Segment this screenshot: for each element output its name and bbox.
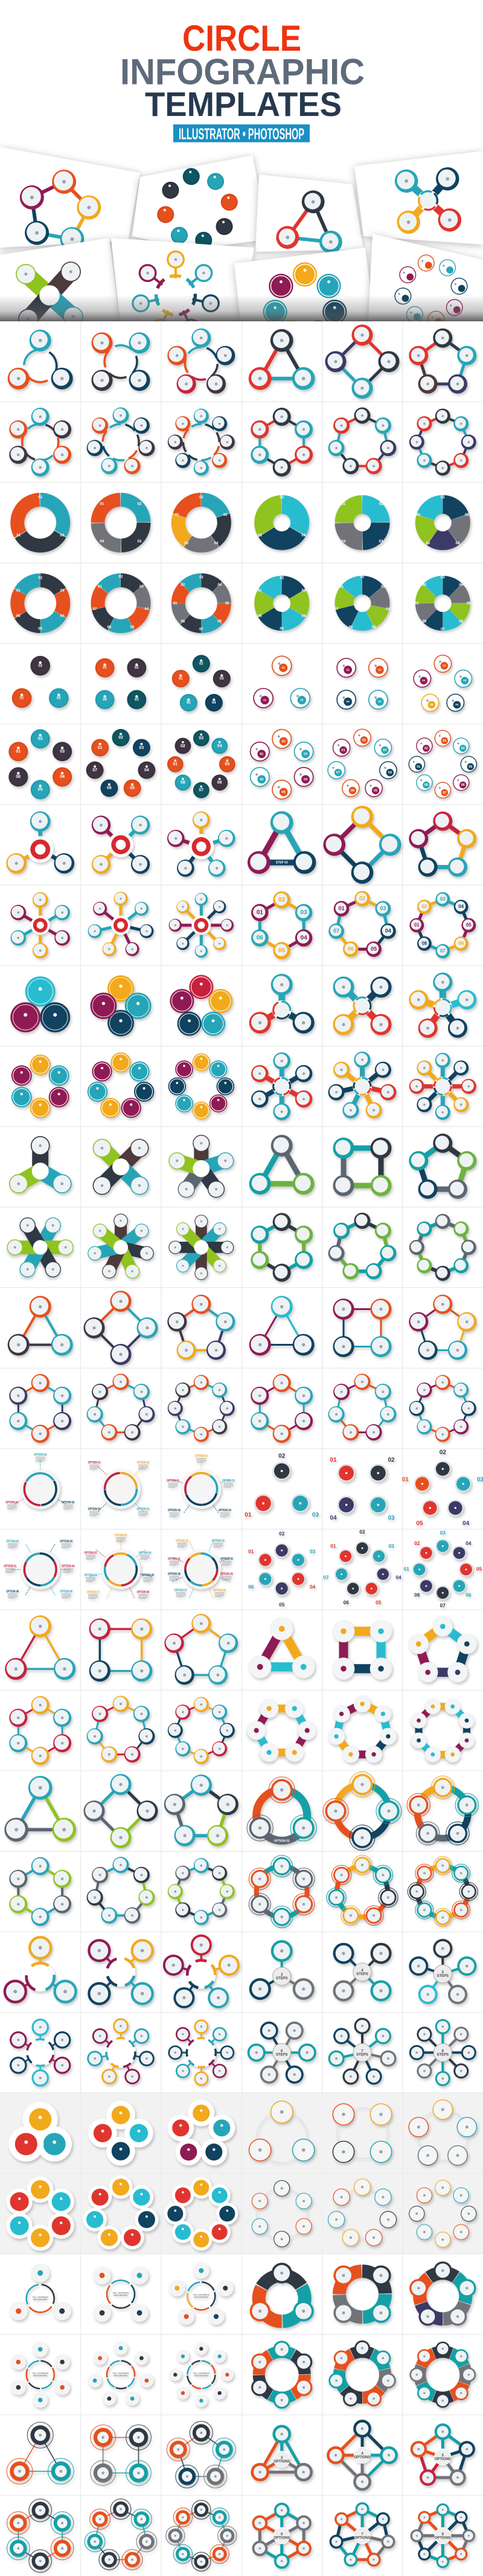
r5c4 wedge nodes 3: [250, 652, 313, 711]
r24c4 light nodes 6: [249, 2178, 315, 2250]
r22c5 steps hub 7: [326, 2016, 398, 2087]
r13c2 ribbon 4: [80, 1288, 161, 1368]
r11c4 step triangle green: [246, 1132, 318, 1198]
r27c4 network 3: [248, 2422, 316, 2484]
row 27: [7, 2417, 478, 2493]
r19c5 option arcs 4: [323, 1772, 401, 1851]
r5c3 discs 5: [169, 652, 233, 714]
r12c3 capsules 8: [167, 1213, 236, 1282]
title line: INFOGRAPHIC: INFOGRAPHIC: [120, 52, 365, 92]
r15c3 option ring 5: [167, 1454, 235, 1517]
r27c6 network 5: OPTIONS: [435, 2458, 451, 2461]
r6c6 wedge nodes 8: [406, 727, 479, 801]
r21c5 steps hub 4: 4: [361, 1969, 363, 1973]
row 5: [9, 652, 475, 715]
r12c5 step ring 7: [326, 1210, 398, 1282]
r23c1 soft circles 3: [4, 2096, 77, 2167]
row 17: [2, 1611, 480, 1688]
r15c2 option ring 4: [88, 1461, 150, 1515]
r18c6 bands 8: [395, 1683, 483, 1778]
r6c5 wedge nodes 7: [325, 726, 400, 800]
r2c2 ring 7: [85, 405, 157, 477]
r26c3 spheres 8: CELL BUSINESS: [193, 2372, 210, 2375]
sheet 4: four-step swirl: [354, 151, 483, 245]
r2c4 polygon 6: [248, 405, 316, 480]
r26c5 thick ring 7: [326, 2338, 398, 2409]
r7c4 step triangle: [244, 808, 319, 878]
r1c6 polygon 5: [406, 326, 479, 396]
row 13: [4, 1288, 479, 1368]
r25c2 spheres 4: CELL BUSINESS: [112, 2292, 129, 2294]
r19c4 option arcs 3: [247, 1777, 316, 1850]
r7c5 step diamond: [320, 803, 405, 887]
r9c1 blobs 3: [6, 972, 75, 1037]
r19c3 ribbon 5: [161, 1771, 242, 1849]
r18c5 bands 7: [325, 1693, 399, 1765]
r25c3 spheres 5: CELL BUSINESS: [193, 2293, 210, 2296]
r27c5 network 4: 4: [361, 2452, 363, 2456]
r2c3 ring 8: [165, 406, 237, 478]
r17c4 bands 3: [245, 1614, 318, 1681]
row 14: [7, 1371, 479, 1445]
row 15: [5, 1449, 483, 1527]
r7c3 spokes 5: [165, 809, 238, 879]
r20c2 ribbon 7: [85, 1854, 157, 1926]
r2c1 ring 6: [7, 405, 74, 480]
r14c1 ribbon 6: [7, 1371, 74, 1445]
r28c2 outlined nodes 7: [85, 2499, 157, 2570]
r23c3 soft circles 5: [164, 2096, 239, 2170]
r20c4 option arcs 6: [247, 1855, 316, 1928]
r21c4 steps hub 3: STEPS: [276, 1977, 288, 1980]
grey background band: [0, 2093, 483, 2254]
r28c6 network 8: 8: [442, 2533, 444, 2536]
r22c6 steps hub 8: [407, 2017, 479, 2089]
row 1: [4, 321, 479, 402]
r24c3 soft circles 8: [161, 2174, 242, 2254]
r1c1 ring 3: [4, 326, 76, 393]
r12c2 capsules 7: [86, 1212, 156, 1280]
sheet 2: eight discs: [129, 153, 260, 247]
sheet 7: overlapping blobs: [231, 245, 371, 321]
r28c6 network 8: [408, 2501, 477, 2570]
r21c1 arrows ring 3: [0, 1932, 81, 2007]
r18c3 arrows lines 8: [165, 1695, 237, 1766]
r25c4 thick ring 3: [246, 2260, 317, 2330]
r9c2 blobs 4: [86, 971, 155, 1040]
r10c6 swirl 8: [407, 1050, 479, 1122]
row 10: [8, 1049, 479, 1123]
r19c1 ribbon 3: [1, 1772, 80, 1845]
r18c1 arrows lines 6: [7, 1694, 74, 1768]
r10c2 blobs 7: [85, 1049, 157, 1121]
row 3: [9, 490, 469, 555]
r17c5 bands 4: [329, 1617, 395, 1683]
r26c2 spheres 7: CELL BUSINESS: [112, 2372, 129, 2375]
row 21: [0, 1932, 479, 2011]
r15c6 half discs 5: [402, 1449, 483, 1527]
r21c4 steps hub 3: [246, 1937, 318, 2003]
r19c4 option arcs 3: OPTION 01: [274, 1840, 290, 1843]
r25c2 spheres 4: INFOGRAPHIC: [114, 2294, 128, 2296]
r27c3 outlined nodes 5: [167, 2421, 235, 2488]
r8c5 numbered ring 7: [326, 888, 398, 959]
r22c4 steps hub 6: 6: [281, 2049, 283, 2053]
r27c4 network 3: 3: [281, 2456, 283, 2460]
r25c1 spheres 3: CELL BUSINESS: [32, 2296, 49, 2298]
r7c2 spokes 4: [89, 813, 153, 876]
r4c2 donut 7: [89, 571, 153, 635]
r21c4 steps hub 3: 3: [281, 1973, 283, 1977]
r7c4 step triangle: STEP 03: [276, 861, 288, 865]
r23c2 soft circles 4: [84, 2096, 158, 2170]
r28c5 network 7: 7: [361, 2533, 363, 2536]
r21c6 steps hub 5: STEPS: [437, 1974, 449, 1978]
r14c3 ribbon 8: [165, 1373, 237, 1444]
r14c5 star line 7: [326, 1371, 398, 1443]
r14c4 star line 6: [248, 1371, 316, 1445]
r16c3 option ring 8: [161, 1529, 242, 1610]
r26c6 thick ring 8: [408, 2339, 478, 2410]
r10c3 blobs 8: [165, 1050, 237, 1122]
row 6: [5, 726, 479, 803]
r25c6 thick ring 5: [407, 2259, 479, 2328]
r8c2 spokes 7: [86, 890, 156, 958]
r26c3 spheres 8: [167, 2340, 235, 2409]
r16c6 half discs 8: [403, 1530, 482, 1608]
r9c5 swirl 4: [330, 974, 395, 1038]
r17c1 arrows lines 3: [2, 1612, 79, 1683]
r23c5 light nodes 4: [329, 2100, 395, 2166]
title line: TEMPLATES: TEMPLATES: [145, 85, 342, 124]
row 16: [2, 1529, 482, 1610]
r24c5 light nodes 7: [325, 2176, 399, 2249]
r25c3 spheres 5: [167, 2260, 236, 2327]
r26c3 spheres 8: INFOGRAPHIC: [194, 2375, 209, 2377]
r26c1 spheres 6: [8, 2339, 72, 2410]
row 4: [9, 571, 471, 635]
r13c1 ribbon 3: [4, 1293, 76, 1359]
r21c5 steps hub 4: [330, 1939, 395, 2005]
r12c1 capsules 6: [0, 1200, 86, 1294]
r4c4 pie 6: [257, 576, 307, 631]
r15c5 half discs 4: [330, 1457, 395, 1521]
r22c4 steps hub 6: [234, 2003, 330, 2102]
r11c5 step square green: [330, 1134, 395, 1200]
r16c4 half discs 6: [248, 1531, 316, 1608]
r7c6 step pentagon: [406, 809, 479, 879]
r22c6 steps hub 8: STEPS: [437, 2053, 449, 2057]
r8c3 spokes 8: [167, 891, 235, 960]
r12c4 step ring 6: [248, 1210, 316, 1285]
r27c6 network 5: [408, 2421, 478, 2488]
r4c5 pie 7: [334, 575, 391, 629]
r6c2 discs 7: [83, 727, 158, 800]
r25c1 spheres 3: [7, 2261, 74, 2323]
r17c2 arrows lines 4: [86, 1615, 156, 1685]
row 11: [6, 1131, 479, 1202]
r1c3 ring 5: [164, 326, 238, 396]
r13c3 ribbon 5: [164, 1292, 238, 1363]
r3c2 donut 4: [88, 490, 153, 555]
r22c4 steps hub 6: STEPS: [276, 2053, 288, 2057]
r26c1 spheres 6: CELL BUSINESS: [32, 2372, 49, 2375]
hero: overlapping template sheets: [0, 147, 483, 348]
sheet 1: five-step star: [0, 147, 140, 259]
r5c6 wedge nodes 5: [411, 652, 475, 715]
row 24: [2, 2172, 479, 2255]
sheet 6: seven arrows: [107, 236, 257, 321]
r9c6 swirl 5: [406, 970, 479, 1041]
row 12: [0, 1200, 479, 1294]
r11c1 capsules 3: [6, 1133, 74, 1196]
r14c2 ribbon 7: [85, 1371, 157, 1443]
r3c6 pie 5: [417, 496, 469, 548]
sheet 5: four-step capsules: [0, 236, 120, 321]
r2c6 polygon 8: [407, 406, 479, 478]
r4c1 donut 6: [9, 572, 72, 635]
r28c1 outlined nodes 6: [7, 2499, 74, 2572]
r22c5 steps hub 7: 7: [361, 2049, 363, 2053]
r16c1 option ring 6: [2, 1530, 78, 1609]
r27c4 network 3: OPTIONS: [273, 2460, 290, 2464]
r27c6 network 5: 5: [442, 2454, 444, 2458]
r3c4 pie 3: [257, 496, 307, 547]
sheet 8: eight pie nodes: [365, 232, 483, 321]
r10c1 blobs 6: [8, 1052, 72, 1121]
r6c1 discs 6: [5, 726, 75, 802]
sheet 3: three-step triangle: [255, 175, 363, 259]
r5c1 discs 3: [9, 653, 72, 711]
r21c3 arrows ring 5: [160, 1932, 243, 2011]
r13c4 star line 3: [246, 1293, 318, 1359]
r6c4 wedge nodes 6: [247, 726, 317, 803]
r23c4 light nodes 3: [245, 2097, 318, 2165]
r13c5 star line 4: [330, 1296, 395, 1360]
r3c1 donut 3: [9, 491, 72, 554]
r20c5 option arcs 7: [327, 1855, 398, 1927]
r19c2 ribbon 4: [80, 1771, 161, 1851]
r11c6 step pentagon green: [406, 1131, 479, 1202]
r26c1 spheres 6: INFOGRAPHIC: [33, 2375, 48, 2377]
r25c1 spheres 3: INFOGRAPHIC: [33, 2298, 48, 2301]
r22c1 arrows ring 6: [7, 2016, 74, 2089]
r21c6 steps hub 5: [406, 1936, 479, 2007]
r6c3 discs 8: [165, 728, 238, 801]
r15c4 half discs 3: [245, 1453, 319, 1518]
r11c2 capsules 4: [90, 1136, 152, 1198]
r21c5 steps hub 4: STEPS: [356, 1973, 368, 1976]
r22c2 arrows ring 7: [85, 2016, 157, 2087]
badge: illustrator and photoshop: [173, 124, 310, 143]
r28c5 network 7: OPTIONS: [354, 2536, 371, 2540]
r25c2 spheres 4: [91, 2264, 151, 2325]
title line: CIRCLE: CIRCLE: [182, 18, 301, 59]
r10c5 swirl 7: [326, 1049, 398, 1121]
r8c6 numbered ring 8: [408, 890, 478, 960]
r18c4 bands 6: [233, 1681, 330, 1781]
r1c5 polygon 4: [322, 321, 403, 402]
r22c3 arrows ring 8: [166, 2017, 237, 2088]
r16c5 half discs 7: [323, 1529, 401, 1605]
r8c4 numbered ring 6: [249, 888, 315, 962]
row 23: [4, 2096, 480, 2170]
r25c3 spheres 5: INFOGRAPHIC: [194, 2296, 209, 2298]
r26c4 thick ring 6: [249, 2338, 315, 2411]
r18c2 arrows lines 7: [85, 1694, 157, 1765]
r7c1 spokes 3: [3, 808, 77, 876]
row 2: [7, 405, 479, 480]
r27c5 network 4: [324, 2417, 400, 2493]
r22c6 steps hub 8: 8: [442, 2049, 444, 2053]
r4c6 pie 8: [415, 576, 471, 631]
r28c4 network 6: OPTIONS: [273, 2536, 290, 2540]
r1c2 ring 4: [88, 329, 153, 394]
r19c6 option arcs 5: [407, 1776, 478, 1848]
r28c5 network 7: [327, 2500, 397, 2569]
r15c1 option ring 3: [5, 1453, 74, 1511]
r14c6 star line 8: [407, 1373, 479, 1444]
row 18: [7, 1681, 483, 1781]
r27c2 outlined nodes 4: [91, 2425, 151, 2485]
r5c5 wedge nodes 4: [333, 655, 391, 713]
row 26: [8, 2338, 478, 2411]
row 8: [8, 888, 478, 962]
row 9: [6, 970, 479, 1041]
r20c3 ribbon 8: [165, 1856, 237, 1927]
r24c1 soft circles 6: [2, 2173, 78, 2255]
badge: illustrator and photoshop: ILLUSTRATOR • PHOTOSHOP: [179, 124, 304, 143]
r16c2 option ring 7: [85, 1534, 155, 1599]
r4c3 donut 8: [169, 571, 234, 635]
row 22: [7, 2003, 479, 2102]
r28c4 network 6: 6: [281, 2533, 283, 2536]
r5c2 discs 4: [92, 655, 149, 712]
r10c4 swirl 6: [249, 1050, 315, 1123]
r20c6 option arcs 8: [407, 1855, 479, 1927]
r26c2 spheres 7: [86, 2339, 156, 2407]
r22c5 steps hub 7: STEPS: [356, 2053, 368, 2057]
r9c4 swirl 3: [246, 971, 318, 1037]
r17c3 arrows lines 5: [162, 1611, 241, 1688]
r24c6 light nodes 8: [406, 2177, 479, 2250]
r25c5 thick ring 4: [330, 2262, 395, 2327]
r9c3 blobs 5: [166, 971, 236, 1039]
r27c5 network 4: OPTIONS: [354, 2456, 371, 2459]
r13c6 star line 5: [406, 1292, 479, 1363]
title: [120, 18, 365, 124]
row 25: [7, 2259, 479, 2330]
r17c6 bands 5: [405, 1613, 480, 1686]
r24c2 soft circles 7: [80, 2172, 162, 2253]
r28c3 outlined nodes 8: [166, 2501, 237, 2571]
r28c6 network 8: OPTIONS: [435, 2536, 451, 2540]
r21c6 steps hub 5: 5: [442, 1971, 444, 1974]
row 28: [7, 2499, 477, 2572]
r8c1 spokes 6: [8, 890, 72, 960]
r3c3 donut 5: [169, 490, 233, 554]
r20c1 ribbon 6: [7, 1854, 74, 1929]
r21c2 arrows ring 4: [84, 1936, 158, 2009]
r1c4 polygon 3: [245, 326, 318, 393]
r27c1 outlined nodes 3: [7, 2422, 74, 2484]
r2c5 polygon 7: [326, 405, 398, 477]
r12c6 step ring 8: [407, 1212, 479, 1283]
r26c2 spheres 7: INFOGRAPHIC: [114, 2375, 128, 2377]
r11c3 capsules 5: [166, 1132, 237, 1200]
r23c6 light nodes 5: [405, 2096, 480, 2169]
row 20: [7, 1854, 479, 1929]
row 7: [3, 803, 479, 887]
r28c4 network 6: [250, 2501, 314, 2571]
r3c5 pie 4: [337, 497, 388, 548]
row 19: [1, 1771, 479, 1851]
hero bottom shadow: [0, 295, 483, 321]
